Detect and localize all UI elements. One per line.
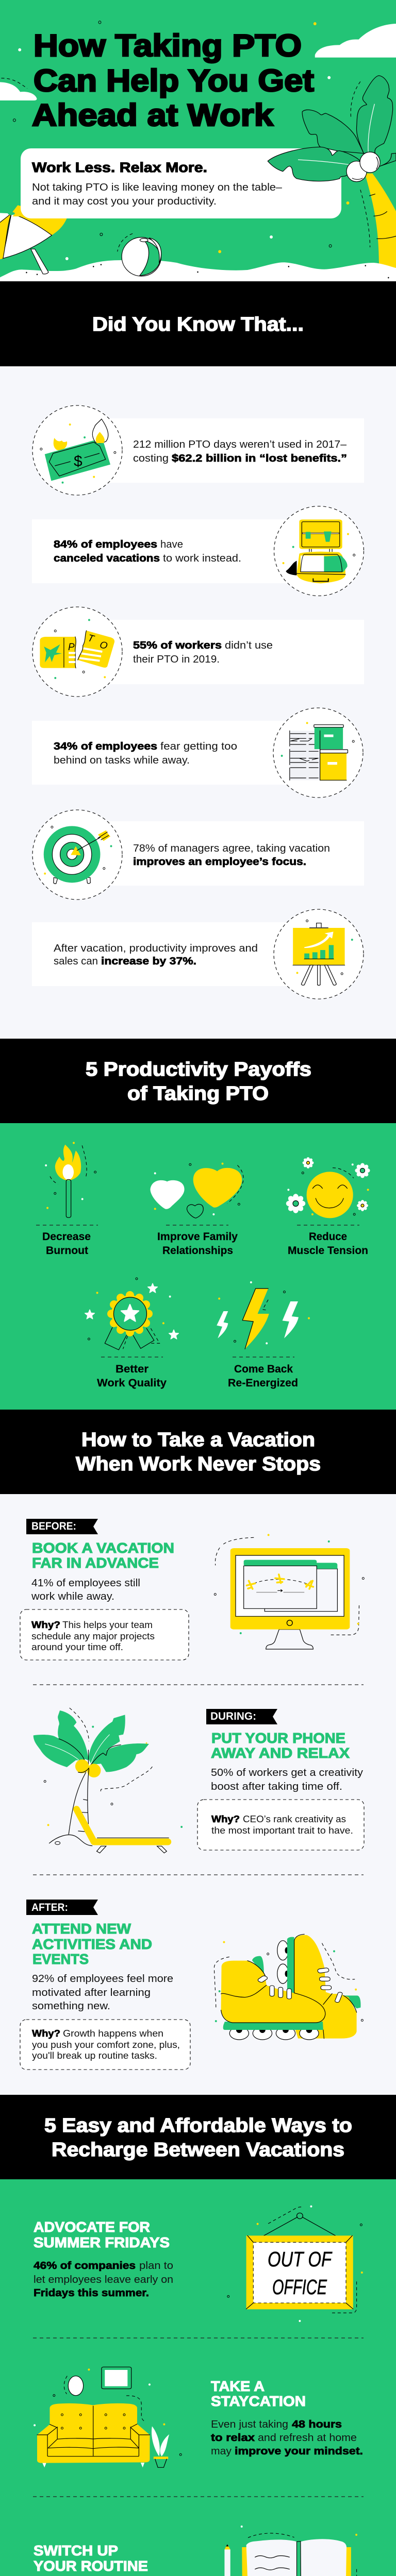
- text: summer fridays: Fridays this summer.: [34, 2287, 149, 2299]
- heading: advocate: [34, 2219, 170, 2250]
- panel: payoff re-energized: [217, 1289, 310, 1389]
- callout: intro card: Not taking PTO is like leaving money on the table–: [32, 181, 283, 193]
- text: fear getting behind: fear getting too: [160, 740, 237, 752]
- title: Can Help You Get: [34, 63, 314, 98]
- callout: why after: Growth happens when: [63, 2028, 163, 2039]
- text: productivity: After vacation, productivity improves and: [54, 942, 258, 954]
- callout: why during: [197, 1800, 364, 1850]
- panel: hero: [0, 0, 396, 281]
- illustration: palm fronds: [268, 76, 396, 182]
- text: canceled vacations: [54, 538, 241, 564]
- panel: stat focus: [32, 810, 364, 900]
- callout: intro card: [21, 148, 341, 218]
- label: [288, 1231, 368, 1257]
- callout: why during: Why?: [211, 1814, 240, 1824]
- callout: intro card: Work Less. Relax More.: [32, 160, 207, 175]
- text: canceled vacations: 84% of employees: [54, 538, 157, 550]
- illustration: out of office sign: OFFICE: [272, 2275, 327, 2299]
- text: unused PTO: didn’t use: [225, 639, 273, 651]
- icon label: ticket letters: T: [87, 633, 96, 645]
- illustration: roller skates: [214, 1934, 363, 2040]
- text: creativity boost: [211, 1767, 364, 1792]
- text: staycation: to relax: [211, 2432, 255, 2444]
- label: Improve Family: [157, 1231, 238, 1243]
- icon: lightning bolts: [217, 1289, 310, 1349]
- text: staycation: improve your mindset.: [235, 2445, 363, 2457]
- text: staycation: may: [211, 2445, 232, 2457]
- text: summer fridays: let employees leave early on: [34, 2274, 173, 2285]
- label: Relationships: [162, 1245, 233, 1257]
- text: unused PTO: their PTO in 2019.: [133, 653, 220, 665]
- heading: book a vacation: BOOK A VACATION: [32, 1540, 174, 1556]
- text: staycation: and refresh at home: [258, 2432, 357, 2444]
- text: staycation: Even just taking: [211, 2418, 288, 2430]
- text: summer fridays: plan to: [139, 2260, 173, 2272]
- heading: advocate: ADVOCATE FOR: [34, 2219, 150, 2235]
- label: [157, 1231, 238, 1257]
- illustration: palm and lounge chair: [34, 1708, 183, 1853]
- callout: why during: the most important trait to have.: [211, 1825, 353, 1836]
- heading band: productivity payoffs: of Taking PTO: [127, 1083, 269, 1105]
- heading: book a vacation: FAR IN ADVANCE: [32, 1555, 159, 1571]
- text: canceled vacations: have: [160, 538, 183, 550]
- flag: after: [26, 1900, 98, 1915]
- heading: staycation: [211, 2378, 306, 2409]
- text: focus: improves an employee’s focus.: [133, 856, 306, 868]
- heading: switch up: SWITCH UP: [34, 2543, 118, 2558]
- heading: put your phone away: PUT YOUR PHONE: [211, 1730, 345, 1746]
- label: Work Quality: [97, 1377, 167, 1389]
- text: canceled vacations: to work instead.: [163, 552, 241, 564]
- title: Ahead at Work: [32, 98, 274, 132]
- text: focus: [133, 842, 330, 868]
- text: lost benefits: $62.2 billion in “lost benefits.”: [172, 452, 347, 464]
- label: Decrease: [42, 1231, 91, 1243]
- panel: before: [20, 1519, 364, 1660]
- heading band: did you know: [0, 281, 396, 366]
- icon: burning dollar bill: [40, 419, 116, 484]
- icon: hearts: [150, 1163, 243, 1218]
- heading: put your phone away: [211, 1730, 350, 1761]
- heading: staycation: TAKE A: [211, 2378, 265, 2394]
- text: fear getting behind: [54, 740, 237, 766]
- callout: why before: [20, 1609, 189, 1660]
- callout: why after: you'll break up routine tasks.: [32, 2050, 157, 2061]
- heading: attend new activities: EVENTS: [32, 1951, 89, 1967]
- flag: during: DURING:: [210, 1710, 256, 1722]
- panel: stat productivity: [32, 909, 364, 999]
- flag: after: AFTER:: [31, 1902, 68, 1913]
- heading: book a vacation: [32, 1540, 174, 1571]
- panel: payoff muscle tension: [286, 1157, 370, 1257]
- text: canceled vacations: canceled vacations: [54, 552, 160, 564]
- label: Muscle Tension: [288, 1245, 368, 1257]
- flag: before: BEFORE:: [31, 1520, 76, 1532]
- heading: attend new activities: ACTIVITIES AND: [32, 1936, 152, 1952]
- heading band: productivity payoffs: 5 Productivity Payoffs: [86, 1059, 311, 1080]
- callout: why after: you push your comfort zone, plus,: [32, 2040, 180, 2050]
- panel: after: [20, 1900, 363, 2070]
- callout: why after: Why?: [32, 2028, 60, 2039]
- icon: torn ticket: [40, 619, 114, 679]
- illustration: hero scene: [0, 21, 396, 275]
- text: summer fridays: 46% of companies: [34, 2260, 136, 2272]
- title: [32, 28, 314, 132]
- illustration: book and pencil: [203, 2526, 368, 2576]
- heading band: recharge: 5 Easy and Affordable Ways to: [44, 2115, 352, 2137]
- callout: why before: schedule any major projects: [31, 1631, 155, 1641]
- heading: attend new activities: ATTEND NEW: [32, 1921, 131, 1937]
- flag: during: [206, 1709, 277, 1724]
- text: motivated: motivated after learning: [32, 1987, 151, 1998]
- icon label: dollar sign: $: [74, 453, 82, 470]
- text: staycation: 48 hours: [292, 2418, 342, 2430]
- callout: why before: around your time off.: [31, 1642, 123, 1652]
- label: [97, 1363, 167, 1389]
- icon: easel chart: [293, 920, 353, 985]
- icon label: ticket letters: [68, 633, 109, 653]
- label: Re-Energized: [228, 1377, 298, 1389]
- callout: intro card: and it may cost you your productivity.: [32, 195, 217, 207]
- icon: paper stack and boxes: [281, 722, 354, 781]
- heading: attend new activities: [32, 1921, 152, 1967]
- heading band: recharge: Recharge Between Vacations: [52, 2139, 344, 2161]
- text: creativity boost: 50% of workers get a creativity: [211, 1767, 364, 1778]
- heading band: recharge: [0, 2095, 396, 2179]
- text: unused PTO: 55% of workers: [133, 639, 222, 651]
- panel: stat fear getting behind: [32, 708, 363, 798]
- callout: why before: This helps your team: [62, 1620, 153, 1630]
- text: work while away: work while away.: [31, 1590, 114, 1602]
- panel: switch up routine: [34, 2526, 368, 2576]
- text: fear getting behind: 34% of employees: [54, 740, 157, 752]
- panel: payoff family relationships: [150, 1163, 243, 1257]
- text: productivity: sales can: [54, 955, 98, 967]
- label: [228, 1363, 298, 1389]
- panel: payoff work quality: [85, 1278, 252, 1389]
- heading: switch up: [34, 2543, 148, 2574]
- illustration: sand wave: [0, 260, 396, 281]
- label: Burnout: [46, 1245, 88, 1257]
- panel: stat unused PTO: [32, 607, 364, 697]
- illustration: out of office sign: [227, 2206, 363, 2322]
- text: productivity: [54, 942, 258, 967]
- label: Reduce: [309, 1231, 347, 1243]
- callout: why before: Why?: [31, 1620, 60, 1630]
- flag: before: [26, 1519, 98, 1534]
- icon: smiley and flowers: [286, 1157, 370, 1218]
- title: How Taking PTO: [34, 28, 302, 63]
- heading band: did you know: Did You Know That...: [92, 314, 304, 335]
- icon: suitcase: [283, 519, 355, 583]
- text: lost benefits: 212 million PTO days weren’t used in 2017–: [133, 438, 347, 450]
- icon: burning match: [45, 1142, 96, 1217]
- text: unused PTO: [133, 639, 273, 665]
- text: motivated: something new.: [32, 2000, 110, 2012]
- illustration: umbrella pole, beach ball, sand specks: [26, 233, 389, 278]
- illustration: monitor booking flights: [214, 1534, 364, 1649]
- panel: stat canceled vacations: [32, 506, 364, 596]
- callout: why during: CEO’s rank creativity as: [243, 1814, 346, 1824]
- heading band: take a vacation: How to Take a Vacation: [81, 1429, 315, 1451]
- text: lost benefits: [133, 438, 347, 464]
- text: fear getting behind: behind on tasks while away.: [54, 754, 190, 766]
- text: summer fridays: [34, 2260, 173, 2299]
- heading: staycation: STAYCATION: [211, 2393, 306, 2409]
- heading band: take a vacation: [0, 1410, 396, 1494]
- panel: during: [34, 1708, 364, 1853]
- illustration: out of office sign: OUT OF: [268, 2247, 333, 2271]
- icon label: ticket letters: P: [68, 642, 75, 653]
- label: Better: [116, 1363, 148, 1375]
- label: Come Back: [234, 1363, 293, 1375]
- panel: summer fridays: [34, 2206, 363, 2322]
- heading: advocate: SUMMER FRIDAYS: [34, 2234, 170, 2250]
- text: motivated: 92% of employees feel more: [32, 1973, 173, 1985]
- text: motivated: [32, 1973, 173, 2012]
- panel: payoff decrease burnout: [36, 1142, 98, 1257]
- text: creativity boost: boost after taking time off.: [211, 1781, 342, 1792]
- heading band: productivity payoffs: [0, 1039, 396, 1123]
- heading: put your phone away: AWAY AND RELAX: [211, 1745, 350, 1761]
- label: [42, 1231, 91, 1257]
- panel: stat lost benefits: [32, 405, 364, 495]
- text: productivity: increase by 37%.: [101, 955, 196, 967]
- text: staycation: [211, 2418, 363, 2457]
- heading band: take a vacation: When Work Never Stops: [76, 1453, 321, 1475]
- text: work while away: [31, 1577, 140, 1602]
- callout: why after: [20, 2020, 190, 2070]
- text: work while away: 41% of employees still: [31, 1577, 140, 1589]
- icon label: ticket letters: O: [98, 639, 109, 652]
- text: focus: 78% of managers agree, taking vacation: [133, 842, 330, 854]
- text: lost benefits: costing: [133, 452, 169, 464]
- illustration: sofa room: [34, 2367, 182, 2467]
- icon: target with arrow: [44, 826, 112, 884]
- heading: switch up: YOUR ROUTINE: [34, 2558, 148, 2574]
- icon: award ribbon: [85, 1278, 252, 1350]
- panel: staycation: [34, 2367, 363, 2467]
